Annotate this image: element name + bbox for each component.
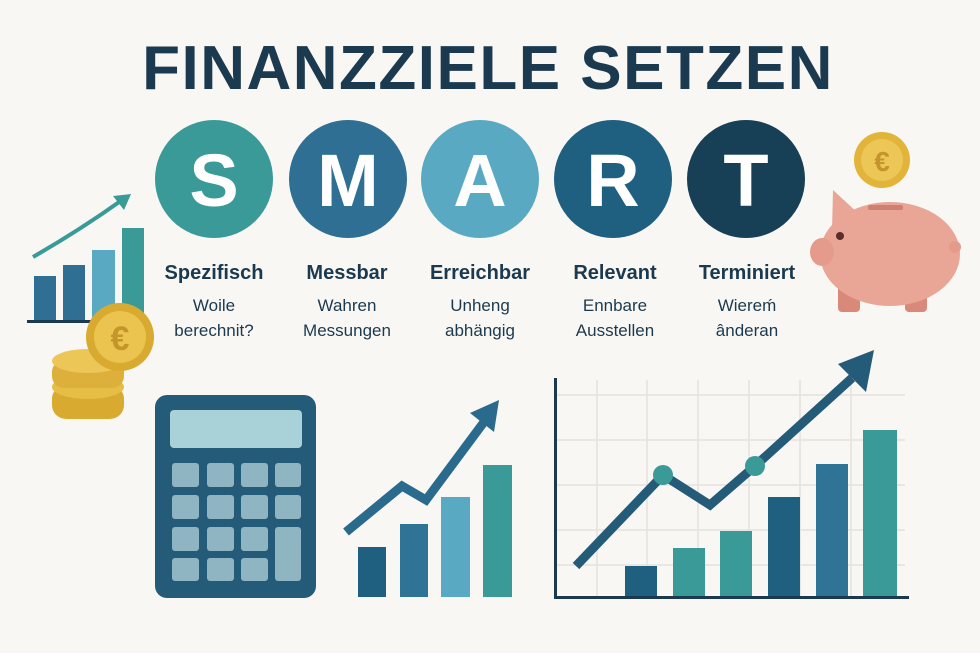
descriptions: ânderan <box>716 321 778 340</box>
circle A <box>421 120 539 238</box>
chart: right bar and line chart <box>554 350 909 599</box>
descriptions: Ausstellen <box>576 321 654 340</box>
circle R <box>554 120 672 238</box>
panel: SMART letters <box>155 120 805 238</box>
icon: piggy bank: € <box>874 146 890 177</box>
icon: coins <box>52 303 154 419</box>
icon: small growth chart <box>27 194 147 323</box>
descriptions: Woile <box>193 296 235 315</box>
circle A: A <box>453 139 507 222</box>
labels: Spezifisch <box>165 262 263 284</box>
circle T <box>687 120 805 238</box>
circle T: T <box>723 139 769 222</box>
descriptions: abhängig <box>445 321 515 340</box>
descriptions: Wahren <box>318 296 376 315</box>
descriptions: Ennbare <box>583 296 647 315</box>
labels: Messbar <box>306 262 388 284</box>
circle S <box>155 120 273 238</box>
labels: Erreichbar <box>430 262 530 284</box>
icon: coins: € <box>111 320 130 358</box>
descriptions: berechnit? <box>174 321 254 340</box>
circle R: R <box>586 139 640 222</box>
title: FINANZZIELE SETZEN <box>142 34 834 103</box>
descriptions: Wiereḿ <box>718 296 776 315</box>
descriptions: Messungen <box>303 321 391 340</box>
descriptions: Unheng <box>450 296 510 315</box>
chart: middle growth <box>346 400 512 597</box>
descriptions <box>174 296 778 340</box>
icon: piggy bank <box>810 132 961 312</box>
labels: Terminiert <box>699 262 795 284</box>
circle M <box>289 120 407 238</box>
icon: calculator <box>155 395 316 598</box>
labels: Relevant <box>573 262 657 284</box>
circle M: M <box>317 139 379 222</box>
labels <box>165 262 795 284</box>
circle S: S <box>189 139 239 222</box>
